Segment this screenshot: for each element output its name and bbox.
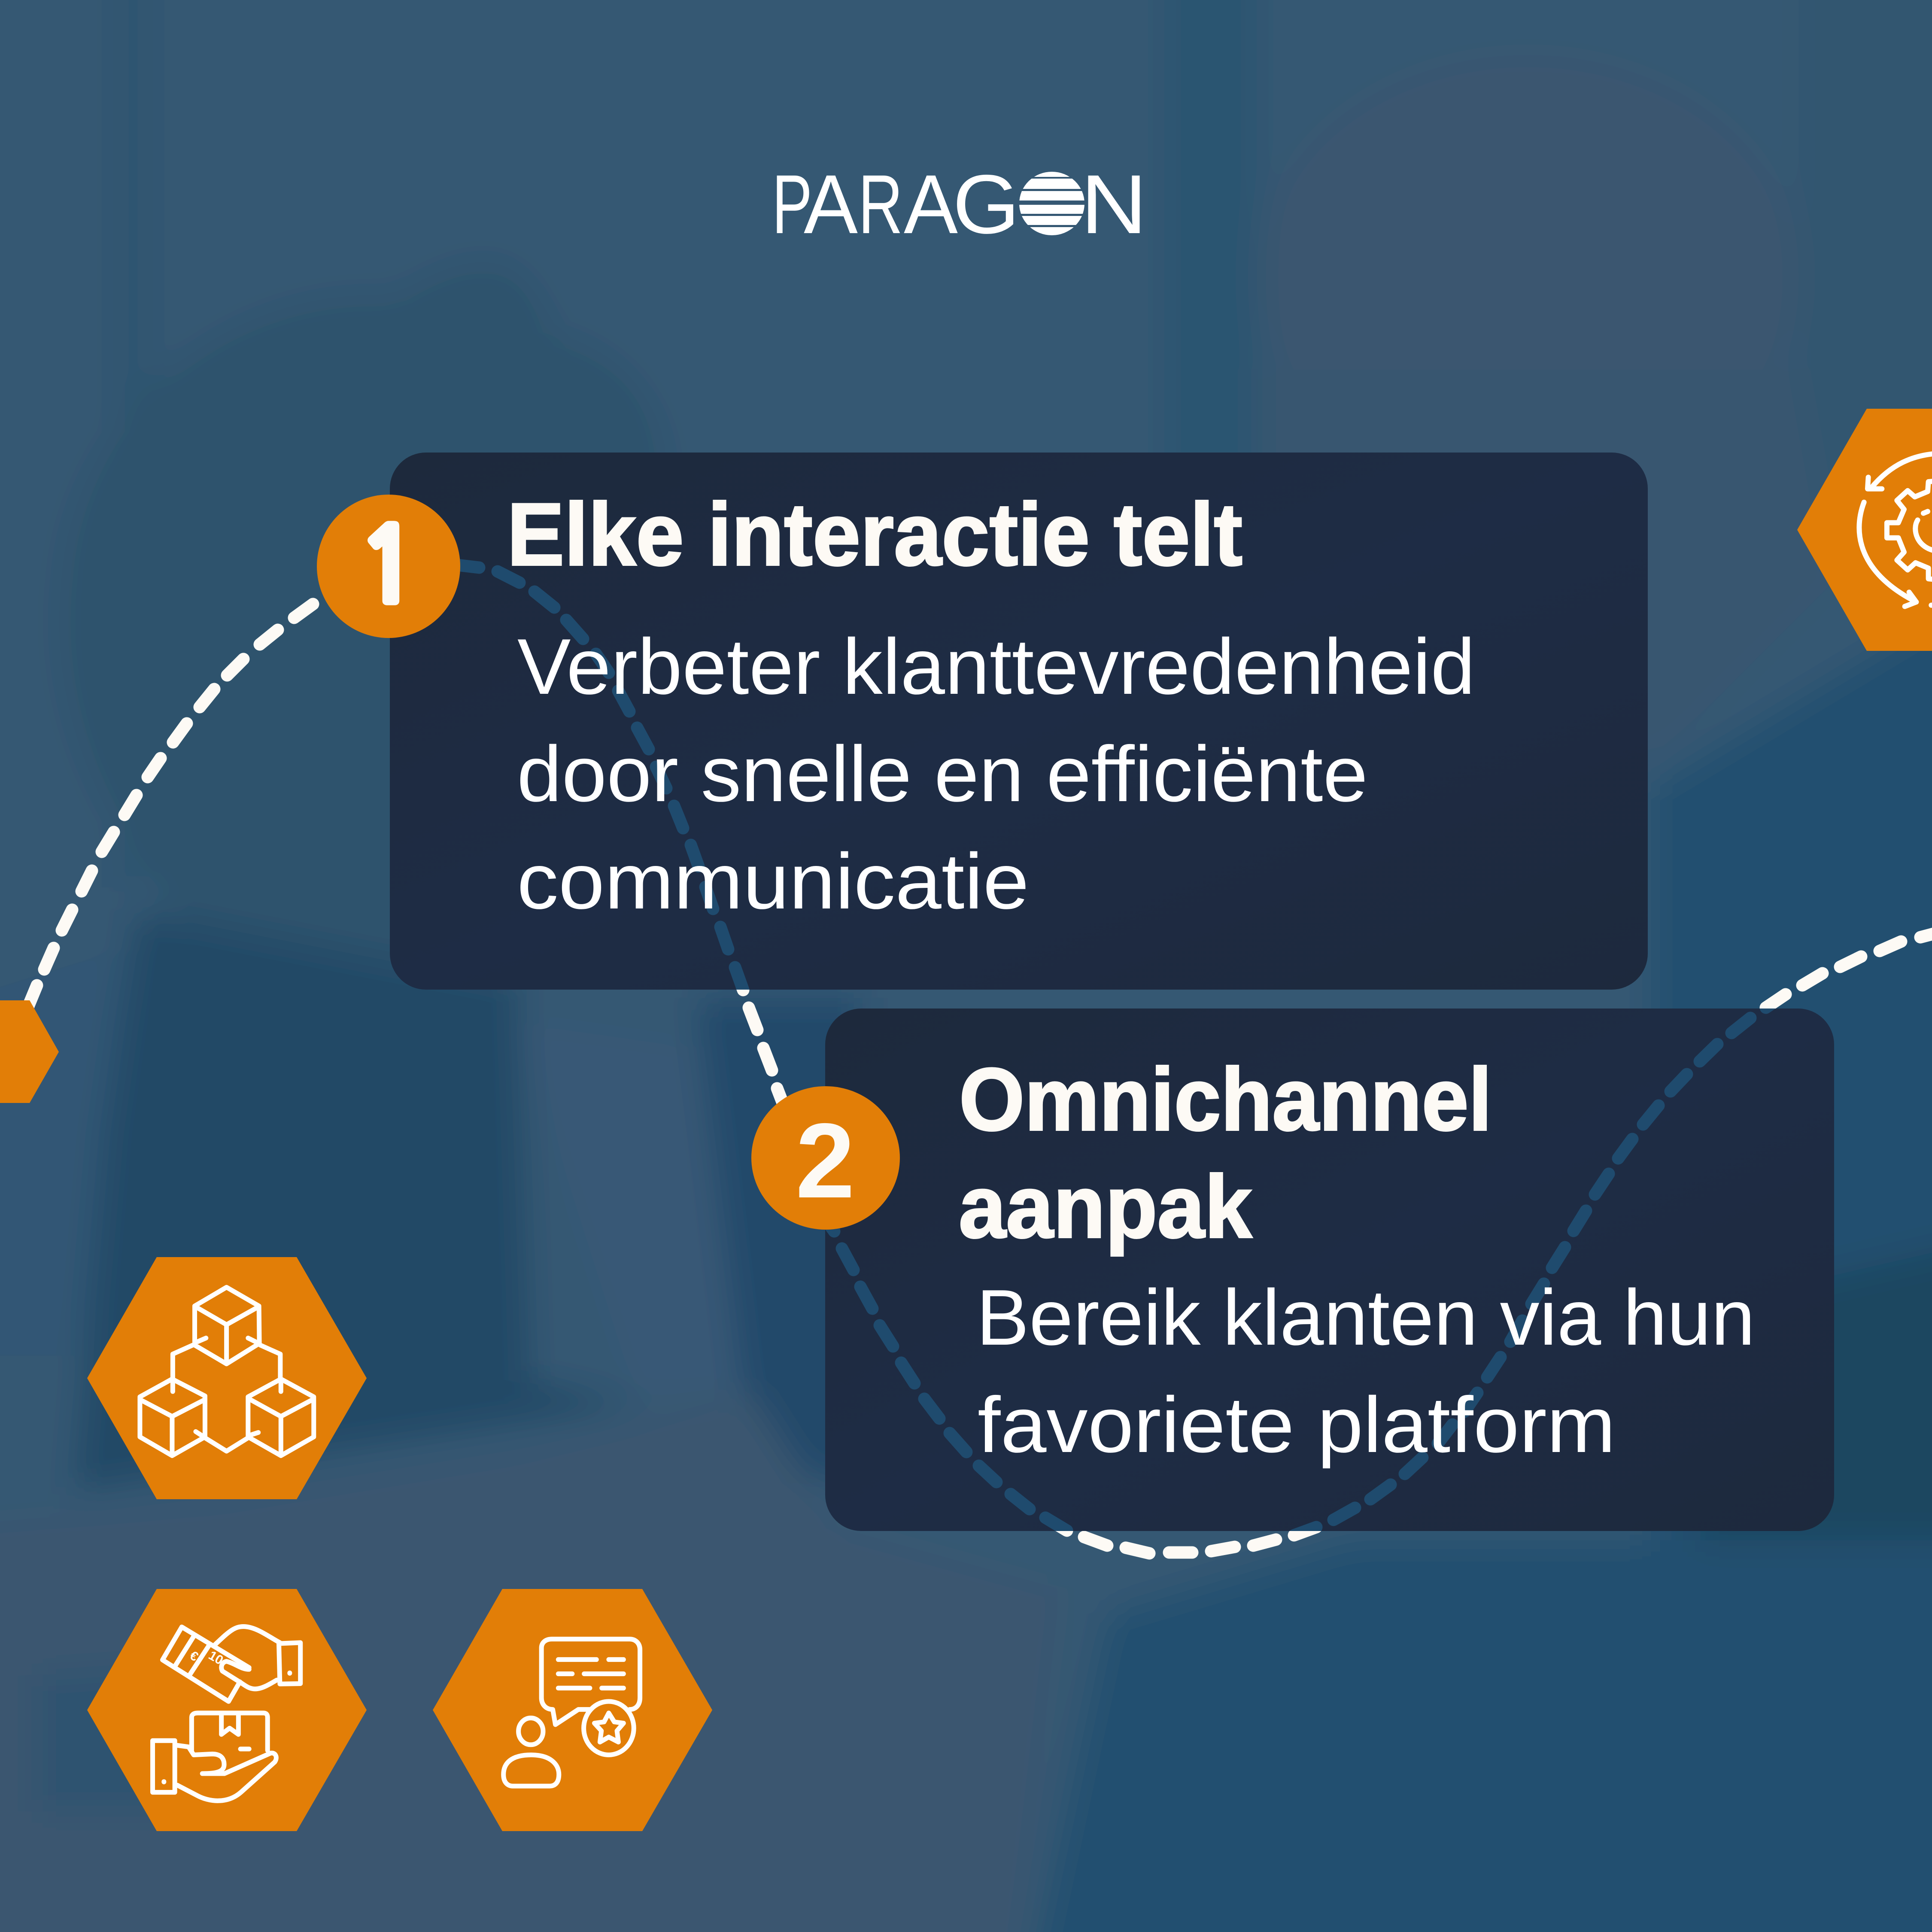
body text: card 1: door snelle en efficiënte (517, 729, 1368, 818)
logo: Paragon (777, 172, 1139, 235)
body text: card 2 (976, 1273, 1755, 1469)
heading: card 1: Elke interactie telt (507, 485, 1242, 584)
white dashed route (24, 565, 1932, 1553)
body text: card 1 (517, 622, 1475, 925)
panel: card 1 (390, 453, 1648, 990)
icon: hands exchanging money and package hexagon: € (187, 1648, 200, 1664)
circle: step 1 (317, 495, 460, 638)
number: 2: 2 (796, 1101, 855, 1220)
icon: hands exchanging money and package hexagon (87, 1589, 367, 1831)
panel: card 2 (825, 1009, 1834, 1531)
logo: Paragon: A (804, 158, 858, 251)
heading: card 2 (959, 1050, 1492, 1256)
body text: card 1: communicatie (517, 837, 1029, 925)
icon: gear hexagon at right edge (1797, 409, 1932, 651)
logo: Paragon: P (772, 158, 812, 251)
partial hexagon at left edge (0, 1000, 59, 1103)
logo: Paragon: N (1081, 158, 1147, 251)
icon: cubes hexagon (87, 1257, 367, 1499)
number: 1: 1 (357, 515, 420, 617)
icon: customer review hexagon (433, 1589, 712, 1831)
heading: card 2: Omnichannel (959, 1050, 1492, 1149)
body text: card 2: Bereik klanten via hun (976, 1273, 1755, 1361)
body text: card 2: favoriete platform (978, 1380, 1616, 1469)
heading: card 2: aanpak (959, 1157, 1252, 1256)
logo: Paragon: A (904, 158, 958, 251)
body text: card 1: Verbeter klanttevredenheid (517, 622, 1475, 711)
logo: Paragon: G (953, 158, 1020, 251)
icon: hands exchanging money and package hexagon: 10 (206, 1648, 225, 1668)
blue dashed route over the cards (457, 565, 1786, 1546)
logo: Paragon: R (858, 158, 903, 251)
circle: step 2 (751, 1086, 900, 1230)
